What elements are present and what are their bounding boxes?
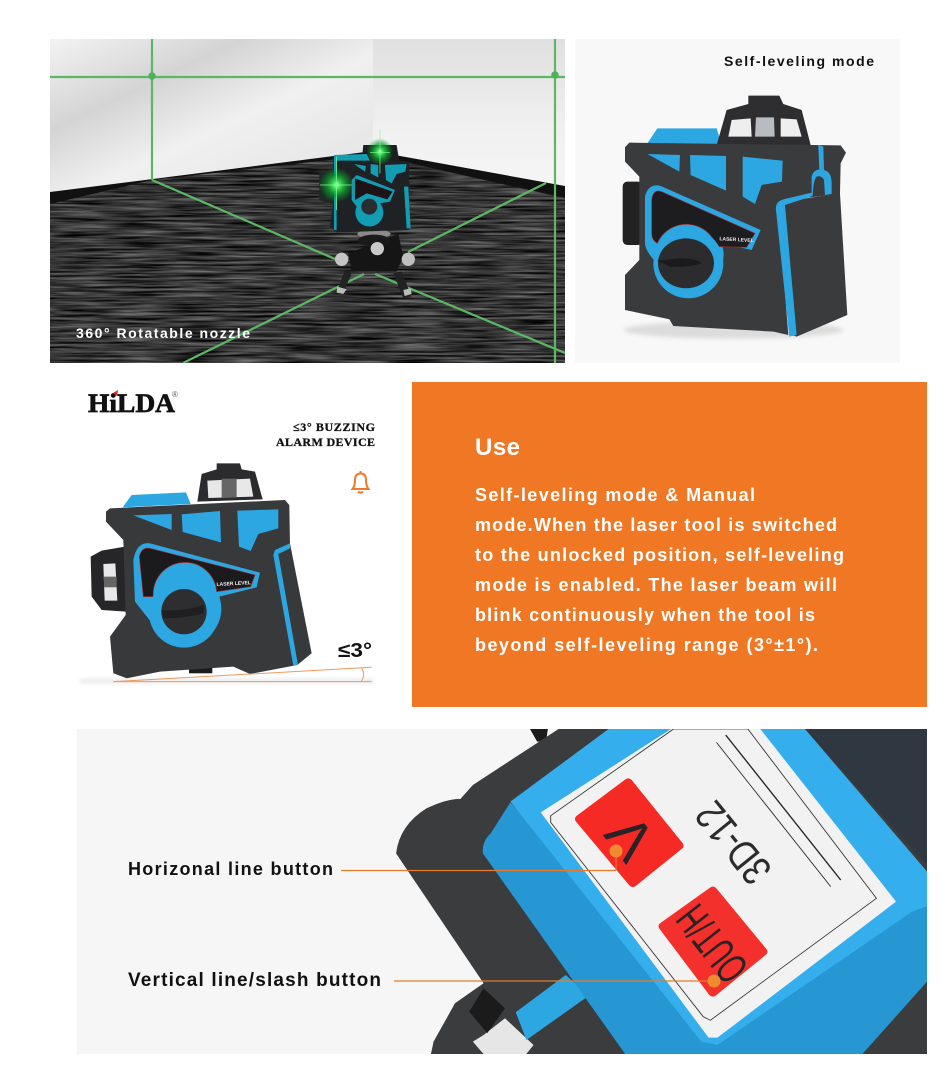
model label: 3D-12: 3D-12 xyxy=(686,792,780,893)
dial black panel xyxy=(139,548,255,597)
button label: V: V xyxy=(593,802,668,873)
red button OUT/H xyxy=(663,891,763,993)
laser glow top xyxy=(367,138,393,165)
callout: vertical line button xyxy=(128,972,720,988)
product label: LASER LEVEL xyxy=(719,236,754,244)
side turret xyxy=(319,170,334,204)
ground shadow xyxy=(80,679,373,683)
body text xyxy=(475,485,844,655)
laser level product xyxy=(623,96,847,339)
panel: 360 rotatable nozzle photo xyxy=(50,39,565,363)
panel background xyxy=(575,39,900,363)
bottom foot xyxy=(189,666,212,673)
dial centre xyxy=(161,589,207,634)
right wall xyxy=(373,39,565,186)
glow streaks xyxy=(320,130,390,210)
dial centre xyxy=(658,238,714,288)
panel: use description xyxy=(412,382,927,707)
body text: to the unlocked position, self-leveling xyxy=(475,545,844,565)
blue stripe xyxy=(516,975,589,1040)
dial lever xyxy=(657,258,702,267)
callout: horizontal line button: Horizonal line button xyxy=(128,859,333,879)
panel: buttons close-up xyxy=(77,729,930,1058)
product label: LASER LEVEL xyxy=(216,580,251,588)
dial black panel xyxy=(652,191,755,247)
callout: horizontal line button xyxy=(129,844,622,875)
laser level on tripod xyxy=(319,130,415,298)
heading: Use: Use xyxy=(475,434,520,461)
panel: self-leveling mode xyxy=(575,39,900,363)
alarm heading: ALARM DEVICE xyxy=(276,435,375,449)
top turret xyxy=(362,145,399,162)
dial ring xyxy=(653,228,723,298)
tilt angle lines xyxy=(113,667,372,682)
side turret xyxy=(91,547,126,612)
logo: HiLDA: HiLDA xyxy=(88,389,175,418)
alarm heading xyxy=(276,420,375,449)
laser intersection dots xyxy=(148,71,559,80)
body shell xyxy=(106,500,312,678)
green laser lines xyxy=(50,39,565,363)
top turret xyxy=(717,96,811,145)
blue front face xyxy=(483,802,930,1058)
caption: 360 rotatable nozzle: 360° Rotatable nozzle xyxy=(76,325,250,341)
lower leg strip xyxy=(473,1018,534,1058)
white label xyxy=(541,729,896,1038)
dial lever xyxy=(162,605,204,618)
battery cover xyxy=(783,193,847,337)
tilt angle label: ≤3° xyxy=(338,640,372,662)
left wall xyxy=(50,39,373,192)
body text: beyond self-leveling range (3°±1°). xyxy=(475,635,818,655)
laser glow side xyxy=(319,168,354,202)
alarm heading: ≤3° BUZZING xyxy=(293,420,375,434)
button label: OUT/H: OUT/H xyxy=(668,895,758,992)
logo: HiLDA: ® xyxy=(172,390,178,399)
close-up of control panel xyxy=(396,729,930,1058)
icon: alarm bell xyxy=(352,471,368,493)
tripod xyxy=(335,229,415,298)
body text: mode.When the laser tool is switched xyxy=(475,515,837,535)
dial surround xyxy=(133,543,260,645)
dark gap xyxy=(469,988,505,1033)
baseboard xyxy=(50,151,565,204)
red button V xyxy=(579,782,679,883)
body text: blink continuously when the tool is xyxy=(475,605,815,625)
blue panels xyxy=(647,145,832,337)
blue panels xyxy=(133,509,298,666)
dark housing xyxy=(396,729,930,1058)
dial ring xyxy=(149,578,219,648)
callout: vertical line button: Vertical line/slash button xyxy=(128,970,381,991)
blue rear cap xyxy=(647,128,722,145)
label double rule xyxy=(716,735,841,887)
shadow xyxy=(623,321,843,339)
body shell xyxy=(625,143,846,335)
dark right side xyxy=(805,729,930,868)
panel background xyxy=(77,729,558,1054)
body xyxy=(330,156,409,232)
black stub xyxy=(530,729,548,742)
wood floor xyxy=(50,150,565,363)
dial panel xyxy=(355,178,393,200)
label outline xyxy=(551,729,876,1020)
orange background xyxy=(412,382,927,707)
body text: Self-leveling mode & Manual xyxy=(475,485,755,505)
blue top face xyxy=(510,729,930,1045)
body text: mode is enabled. The laser beam will xyxy=(475,575,837,595)
top turret xyxy=(197,463,263,502)
dial blue surround xyxy=(645,185,761,290)
teal accents xyxy=(334,154,411,230)
caption: self-leveling mode: Self-leveling mode xyxy=(724,53,874,69)
blue rear cap xyxy=(123,492,191,507)
panel: buzzing alarm product xyxy=(80,389,375,683)
side knob xyxy=(623,182,643,245)
tilted laser level xyxy=(80,463,373,683)
